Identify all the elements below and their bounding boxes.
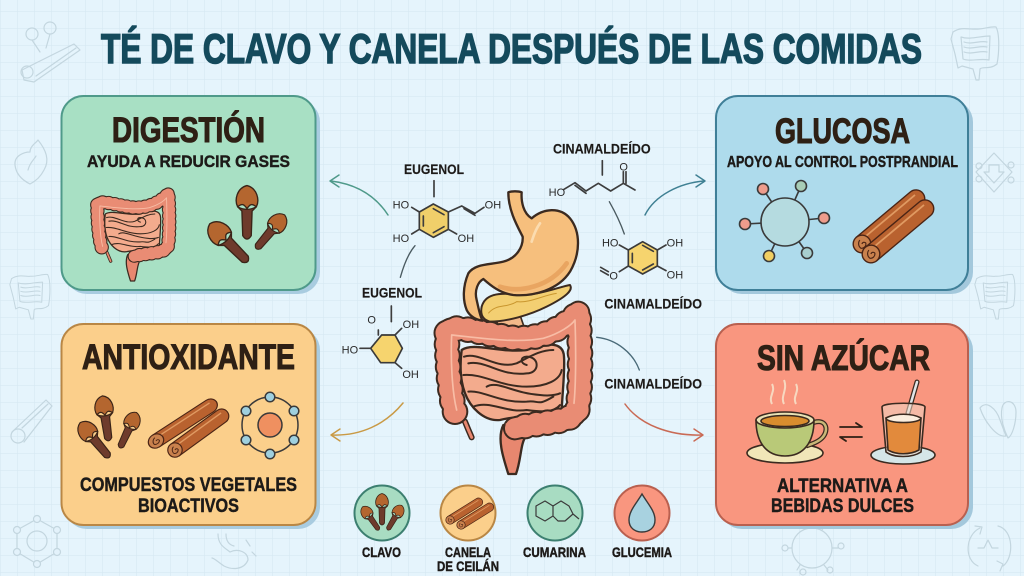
text: ayuda a reducir gases: AYUDA A REDUCIR GASES (87, 152, 290, 171)
icon: faint virus (782, 525, 844, 575)
molecule: eugenol top: OH (485, 199, 501, 211)
label: glucemia: GLUCEMIA (612, 544, 672, 560)
connector: cinamaldeído link (609, 202, 624, 234)
icon: faint cycle arrows (968, 526, 1011, 571)
molecule: eugenol lower (342, 306, 419, 381)
molecule: cinamaldehyde ring: HO (602, 238, 619, 250)
arrow: to antioxidante (331, 403, 403, 441)
icon: drop (629, 494, 655, 532)
central organs and molecules (342, 140, 702, 474)
connector: eugenol link (400, 246, 415, 277)
icon: cinnamon stick (850, 186, 937, 266)
label: de ceilán: DE CEILÁN (437, 558, 499, 574)
panel: sin azúcar (716, 324, 973, 529)
icon: faint molecule ring (14, 516, 60, 568)
label: eugenol top: EUGENOL (404, 161, 464, 177)
label: clavo: CLAVO (362, 544, 401, 560)
text: alternativa a: ALTERNATIVA A (777, 476, 908, 497)
legend: canela de ceilán (437, 486, 499, 574)
molecule: cinamaldehyde chain: HO (549, 187, 566, 199)
text: apoyo al control postprandial: APOYO AL CONTROL POSTPRANDIAL (727, 154, 958, 171)
icon: cinnamon (444, 496, 495, 531)
label: eugenol lower: EUGENOL (362, 285, 422, 301)
icon: faint hexagon shield (976, 153, 1014, 192)
molecule: eugenol top (393, 181, 501, 245)
heading: glucosa: GLUCOSA (775, 112, 910, 151)
icon: faint intestine left (10, 274, 50, 319)
text: bebidas dulces: BEBIDAS DULCES (771, 496, 914, 517)
molecule: cinamaldehyde ring (601, 238, 683, 282)
molecule: eugenol lower: HO (342, 344, 359, 356)
molecule: cinamaldehyde chain (549, 161, 635, 199)
icon: coumarin structure (536, 501, 579, 521)
heading: sin azúcar: SIN AZÚCAR (757, 338, 930, 378)
molecule: eugenol top: HO (393, 233, 410, 245)
legend: clavo (354, 486, 410, 560)
heading: antioxidante: ANTIOXIDANTE (82, 338, 295, 377)
icon: faint cinnamon left (11, 400, 52, 443)
label: cinamaldeído top: CINAMALDEÍDO (553, 140, 651, 156)
arrow: to sin azúcar (625, 404, 703, 441)
molecule: cinamaldehyde chain: O (619, 162, 628, 174)
icon: exchange arrows (840, 423, 862, 441)
icon: cloves (202, 186, 291, 269)
label: canela: CANELA (445, 544, 491, 560)
label: cinamaldeído middle: CINAMALDEÍDO (604, 295, 702, 311)
molecule: eugenol lower: OH (402, 369, 419, 381)
molecule: cinamaldehyde ring: O (609, 270, 618, 282)
panel: glucosa (716, 96, 973, 294)
molecule: eugenol lower: O (367, 314, 376, 326)
label: cinamaldeído lower: CINAMALDEÍDO (604, 375, 702, 391)
text: compuestos vegetales: COMPUESTOS VEGETALES (80, 475, 297, 496)
legend: cumarina (523, 486, 586, 560)
panel: digestión (62, 96, 320, 294)
icon: intestine (97, 194, 169, 281)
molecule: cinamaldehyde ring: OH (667, 270, 683, 282)
icon: faint flame (15, 140, 47, 184)
icon: cinnamon sticks (146, 396, 232, 460)
molecule: cinamaldehyde ring: OH (667, 238, 683, 250)
molecule: eugenol top: OH (458, 233, 474, 245)
arrow: to glucosa (645, 175, 705, 215)
icon: tea cup (747, 380, 826, 463)
icon: faint stomach (212, 534, 256, 568)
icon: atom (241, 392, 299, 459)
heading: digestión: DIGESTIÓN (112, 110, 265, 150)
icon: stomach (464, 191, 578, 321)
legend: glucemia (612, 486, 672, 560)
panel: antioxidante (62, 324, 320, 529)
icon: glucose molecule (740, 180, 830, 262)
icon: intestines (447, 313, 580, 474)
connector: colon link (597, 337, 639, 370)
icon: pancreas stub (497, 315, 524, 330)
icon: faint intestine top right (951, 27, 999, 80)
icon: pancreas (481, 285, 571, 322)
arrow: to digestión (330, 175, 388, 215)
icon: sweet drink (871, 382, 935, 464)
icon: faint cloves and cinnamon (21, 22, 80, 82)
molecule: eugenol top: HO (393, 199, 410, 211)
text: bioactivos: BIOACTIVOS (138, 496, 239, 517)
icon: cloves (73, 395, 144, 463)
molecule: eugenol lower: OH (403, 319, 419, 331)
icon: cloves (358, 494, 407, 533)
icon: faint peppers (980, 402, 1016, 438)
label: cumarina: CUMARINA (523, 544, 586, 560)
icon: faint intestine right (975, 274, 1015, 319)
